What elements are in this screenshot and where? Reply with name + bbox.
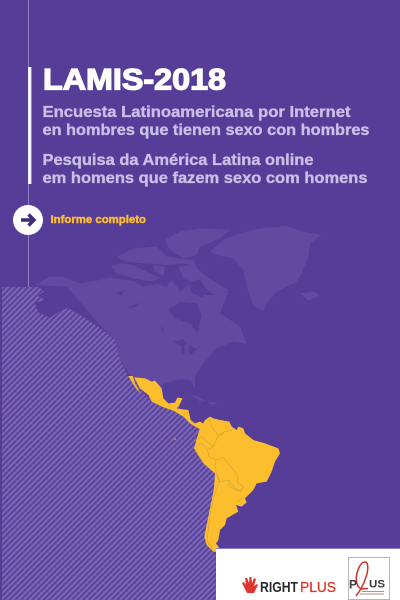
subtitle: Portuguese: em homens que fazem sexo com homens <box>42 170 368 187</box>
icon: arrow button <box>13 205 43 235</box>
subtitle: Portuguese <box>42 152 368 187</box>
logo: Plus <box>348 558 390 600</box>
title accent bar <box>28 67 31 184</box>
map: Hudson Bay <box>168 302 202 333</box>
map: Great Slave Lake <box>128 303 140 307</box>
subtitle: Portuguese: Pesquisa da América Latina online <box>42 152 314 169</box>
map: Central America borders <box>168 403 195 423</box>
map: North America and Greenland silhouette <box>35 226 322 390</box>
hatched Pacific ocean area <box>2 287 216 600</box>
map: Galapagos islands <box>174 438 176 440</box>
map: Great Bear Lake <box>115 290 125 295</box>
link label: Informe completo <box>50 214 146 226</box>
map: Lake Winnipeg <box>161 327 165 335</box>
map: Foxe Basin <box>188 279 208 297</box>
title: LAMIS-2018 <box>43 64 226 96</box>
map: South America <box>174 417 280 553</box>
logo: RightPlus <box>242 577 336 596</box>
map: Caribbean islands <box>189 395 217 404</box>
map: country borders <box>194 418 245 550</box>
vertical thin line <box>28 0 29 287</box>
subtitle: Spanish: Encuesta Latinoamericana por Internet <box>42 104 351 121</box>
subtitle: Spanish <box>42 104 370 139</box>
logo: RightPlus: RIGHT <box>260 579 298 596</box>
logo: Plus: US <box>369 578 385 590</box>
map: Mexico and Central America <box>128 376 207 432</box>
map: Great Lakes <box>173 339 200 355</box>
footer logo panel <box>216 548 400 600</box>
logo: Plus: P <box>349 578 357 592</box>
logo: RightPlus: PLUS <box>300 579 336 596</box>
subtitle: Spanish: en hombres que tienen sexo con hombres <box>42 122 370 139</box>
